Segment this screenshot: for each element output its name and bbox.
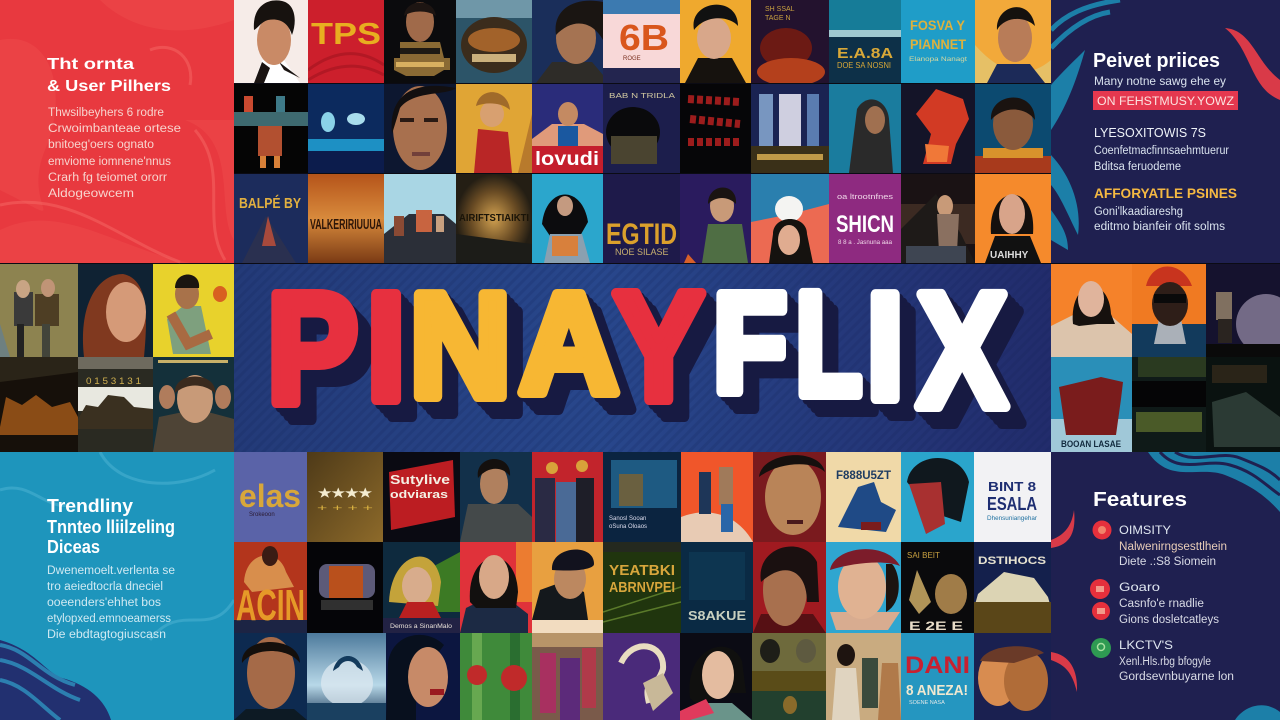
poster: cream with blue [826,452,901,542]
poster: green with red apples [460,633,532,720]
poster: ACIN gold [234,542,307,633]
text block: affordable prices [1094,186,1237,233]
poster: DANI red on blue: SOENE NASA [909,700,945,706]
poster: blue ship poster: Sanosl Sooan [609,516,646,522]
poster: TPS on red: TPS [311,16,381,51]
poster: woman on orange, right [1051,264,1132,357]
poster: colorful crowd [532,633,603,720]
poster: yellow hood woman [383,542,460,633]
poster: glowing brown [456,174,532,263]
poster: SHICN purple: oa ltrootnfnes [837,194,894,201]
poster: woman close-up [384,84,456,173]
text block: red panel body: Thwsilbeyhers 6 rodre [48,107,164,119]
poster: cream with blue: F888U5ZT [836,468,892,482]
text block: red panel body: Crwoimbanteae ortese [48,123,181,135]
text block: teal panel body: Die ebdtagtogiuscasn [47,629,166,641]
poster: emblem on black [307,542,383,633]
poster: man on dark red [753,542,826,633]
poster: two faces [974,633,1051,720]
poster: mountain [974,542,1051,633]
poster: blue ship poster [603,452,681,542]
text block: subsection: Bditsa feruodeme [1094,161,1181,173]
poster: stars on gold: ★★★★ [318,486,372,500]
poster: red-haired woman [78,264,153,357]
poster: woman with dress [532,174,603,263]
panel: central logo banner [234,259,1051,452]
poster: woman with pink ticket [680,633,752,720]
text block: red panel body: emviome iomnene'nnus [48,156,171,168]
poster: woman on dark brown [901,174,975,263]
poster: ESALA white: Dhensuniangehar [987,516,1037,522]
heading: trending: Trendliny [47,496,133,516]
poster: orange 6B: 6B [619,17,669,58]
poster: teal gold text: E.A.8A [837,45,893,62]
poster: red sign: odviaras [390,489,448,501]
poster: man with red background [753,452,826,542]
poster: elas on blue: Srokeoon [249,512,275,518]
poster: ESALA white: BINT 8 [988,479,1036,494]
poster: red text on teal [1051,357,1132,452]
poster: elas on blue: elas [239,478,301,514]
heading: trending [47,496,175,557]
poster: orange 6B: ROGE [623,56,641,62]
poster: man in gray jacket [460,452,532,542]
poster: green with title: YEATBKI [609,562,675,579]
panel: teal trending [0,452,234,720]
poster: red text on teal: BOOAN LASAE [1061,439,1121,449]
title: PINAYFLIX logo: X [917,259,1007,441]
poster: dark window [603,84,680,173]
text block: red panel body [48,107,181,200]
poster: gold figures [752,633,826,720]
poster: blue with gold title: FOSVA Y [910,17,966,33]
poster: red bush: SH SSAL [765,6,795,13]
poster: green with title [603,542,681,633]
poster: dune with text [308,174,384,263]
title: PINAYFLIX logo: A [519,264,619,423]
heading: trending: Tnnteo lliilzeling [47,517,175,537]
poster: S8AKUE [681,542,753,633]
poster: blue ship poster: oSuna Oloaos [609,524,647,530]
feature: genre: Goaro [1119,580,1160,594]
title: PINAYFLIX logo: Y [614,260,704,432]
poster: red hat woman [826,542,901,633]
text block: teal panel body [47,565,175,641]
poster: black with gold masks [901,542,974,633]
poster: figure on gold [456,84,532,173]
poster: hooded figure on teal [829,84,901,173]
text block: red panel body: Crarh fg teiomet ororr [48,172,167,184]
poster: EGTID gold [603,174,680,263]
text block: red panel body: bnitoeg'oers ognato [48,139,154,151]
text block: teal panel body: ooeenders'ehhet bos [47,597,161,609]
poster: purple swirl [603,633,680,720]
heading: data and user pillars [47,56,171,95]
poster: SHICN purple: 8 8 a . Jasnuna aaa [838,240,893,246]
poster: DANI red on blue [901,633,974,720]
poster: S8AKUE: S8AKUE [688,608,746,623]
poster: red bush [751,0,829,83]
feature: genre: Gions dosletcatleys [1119,614,1219,626]
feature: diversity: Nalwenirngsesttlhein [1119,541,1227,553]
text block: affordable prices: AFFORYATLE PSINES [1094,186,1237,201]
poster: man on white grid [234,0,308,83]
poster: man with medals [975,84,1051,173]
heading: data and user pillars: & User Pilhers [47,78,171,95]
poster: couple on olive [0,264,78,357]
poster: woman with black hair on yellow [680,0,751,83]
poster: stars on gold [307,452,383,542]
poster: lovudi [532,84,603,173]
icon: two red circles [1090,579,1110,620]
icon: green circle [1091,638,1111,658]
poster: woman on orange: UAIHHY [990,250,1029,261]
poster: blue with gold title [901,0,975,83]
poster: ornate vehicle [456,0,532,83]
poster: mountain: DSTIHOCS [978,555,1046,567]
text block: subsection: LYESOXITOWIS 7S [1094,125,1206,140]
poster: face profile on blue [901,452,974,542]
poster: red hat face [1132,264,1206,357]
poster: red robed figure [901,84,975,173]
poster: ESALA white [974,452,1051,542]
heading: trending: Diceas [47,537,100,557]
poster: blue glow arch [307,633,386,720]
poster: man looking down [532,0,603,83]
panel: red data and user pillars [0,0,234,263]
poster: black hat [532,542,603,633]
title: PINAYFLIX logo: F [713,264,787,422]
poster: man on yellow [153,264,234,357]
poster: DANI red on blue: DANI [905,652,970,679]
title: PINAYFLIX logo: N [410,262,511,428]
text line: Many notne sawg ehe ey [1094,74,1226,88]
title: PINAYFLIX logo [267,259,1007,441]
poster: lovudi: lovudi [535,149,599,170]
poster: man with jacket [153,357,234,452]
poster: blue water night [308,84,384,173]
poster: red sign: Sutylive [390,472,450,487]
text block: affordable prices: editmo bianfeir ofit solms [1094,221,1225,233]
callout: pink highlight: ON FEHSTMUSY.YOWZ [1097,96,1234,108]
text block: subsection: Coenfetmacfinnsaehmtuerur [1094,145,1229,157]
text block: red panel body: Aldogeowcem [48,188,134,200]
poster: man with ornate sign [394,2,450,76]
poster: figures under sky [384,174,456,263]
poster: red sign [383,452,460,542]
text block: affordable prices: Goni'lkaadiareshg [1094,206,1183,218]
poster: teal gold text: DOE SA NOSNI [837,61,891,70]
poster: figures on red [532,452,603,542]
heading: prices: Peivet priices [1093,50,1220,72]
poster: sad man [234,633,307,720]
poster: dark window: BAB N TRIDLA [609,93,675,100]
poster: colorful sign figure [234,84,308,173]
feature: genre [1090,579,1219,626]
poster: dark scene [1206,357,1280,452]
poster: smiling woman on red [460,542,532,633]
poster: ESALA white: ESALA [987,494,1037,514]
poster: red bush: TAGE N [765,15,791,22]
panel: navy prices [1051,0,1280,263]
heading: data and user pillars: Tht ornta [47,56,134,73]
heading: features: Features [1093,489,1187,511]
poster: red glyphs on black [680,84,751,173]
poster: white sky castle: 0 1 5 3 1 3 1 [86,376,141,386]
poster: blue with gold title: Elanopa Nanagt [909,57,967,63]
text block: teal panel body: Dwenemoelt.verlenta se [47,565,175,577]
poster: SHICN purple [829,174,901,263]
feature: genre: Casnfo'e rnadlie [1119,598,1204,610]
panel: navy features [1051,452,1280,720]
poster: glowing brown: AIRIFTSTIAIKTI [459,213,529,224]
poster: woman in profile [386,633,460,720]
title: PINAYFLIX logo: I [367,261,405,432]
text block: teal panel body: etylopxed.emnoeamerss [47,613,171,625]
text block: teal panel body: tro aeiedtocrla dneciel [47,581,163,593]
poster: gold title mountain [234,174,308,263]
title: PINAYFLIX logo: P [267,262,358,437]
poster: couple on orange [681,452,753,542]
feature: diversity [1092,520,1227,568]
poster: columns [751,84,829,173]
poster: burning forest [0,357,78,452]
poster: stars on gold: + + + + [317,503,373,513]
poster: yellow hood woman: Demos a SinanMalo [390,623,452,630]
feature: live tv: Gordsevnbuyarne lon [1119,671,1234,683]
callout: pink highlight [1093,91,1238,110]
title: PINAYFLIX logo: L [795,263,862,426]
title: PINAYFLIX logo: I [866,263,904,431]
poster: DANI red on blue: 8 ANEZA! [906,682,968,699]
poster: white sky castle [78,357,153,452]
icon: red circle [1092,520,1112,540]
poster: elas on blue [234,452,307,542]
text block: subsection [1094,125,1229,173]
poster: orange 6B [603,0,680,83]
poster: woman on orange [975,174,1051,263]
poster: man on yellow circle [975,0,1051,83]
poster: woman in green [680,174,751,263]
feature: live tv [1091,638,1234,683]
poster: black with gold masks: SAI BEIT [907,551,940,560]
feature: diversity: OIMSITY [1119,523,1171,537]
feature: live tv: LKCTV'S [1119,638,1173,652]
poster: blue with gold title: PIANNET [910,36,966,52]
poster: dark green night [1132,357,1206,452]
poster: woman with white hat [751,174,829,263]
poster: group of people [826,633,901,720]
poster: teal gold text [829,0,901,83]
poster: TPS on red [308,0,384,83]
poster: dark purple glow [1206,264,1280,357]
poster: black with gold masks: E 2E E [909,619,963,633]
feature: live tv: Xenl.Hls.rbg bfogyle [1119,656,1211,668]
feature: diversity: Diete .:S8 Siomein [1119,556,1216,568]
poster: EGTID gold: NOE SILASE [615,247,669,257]
